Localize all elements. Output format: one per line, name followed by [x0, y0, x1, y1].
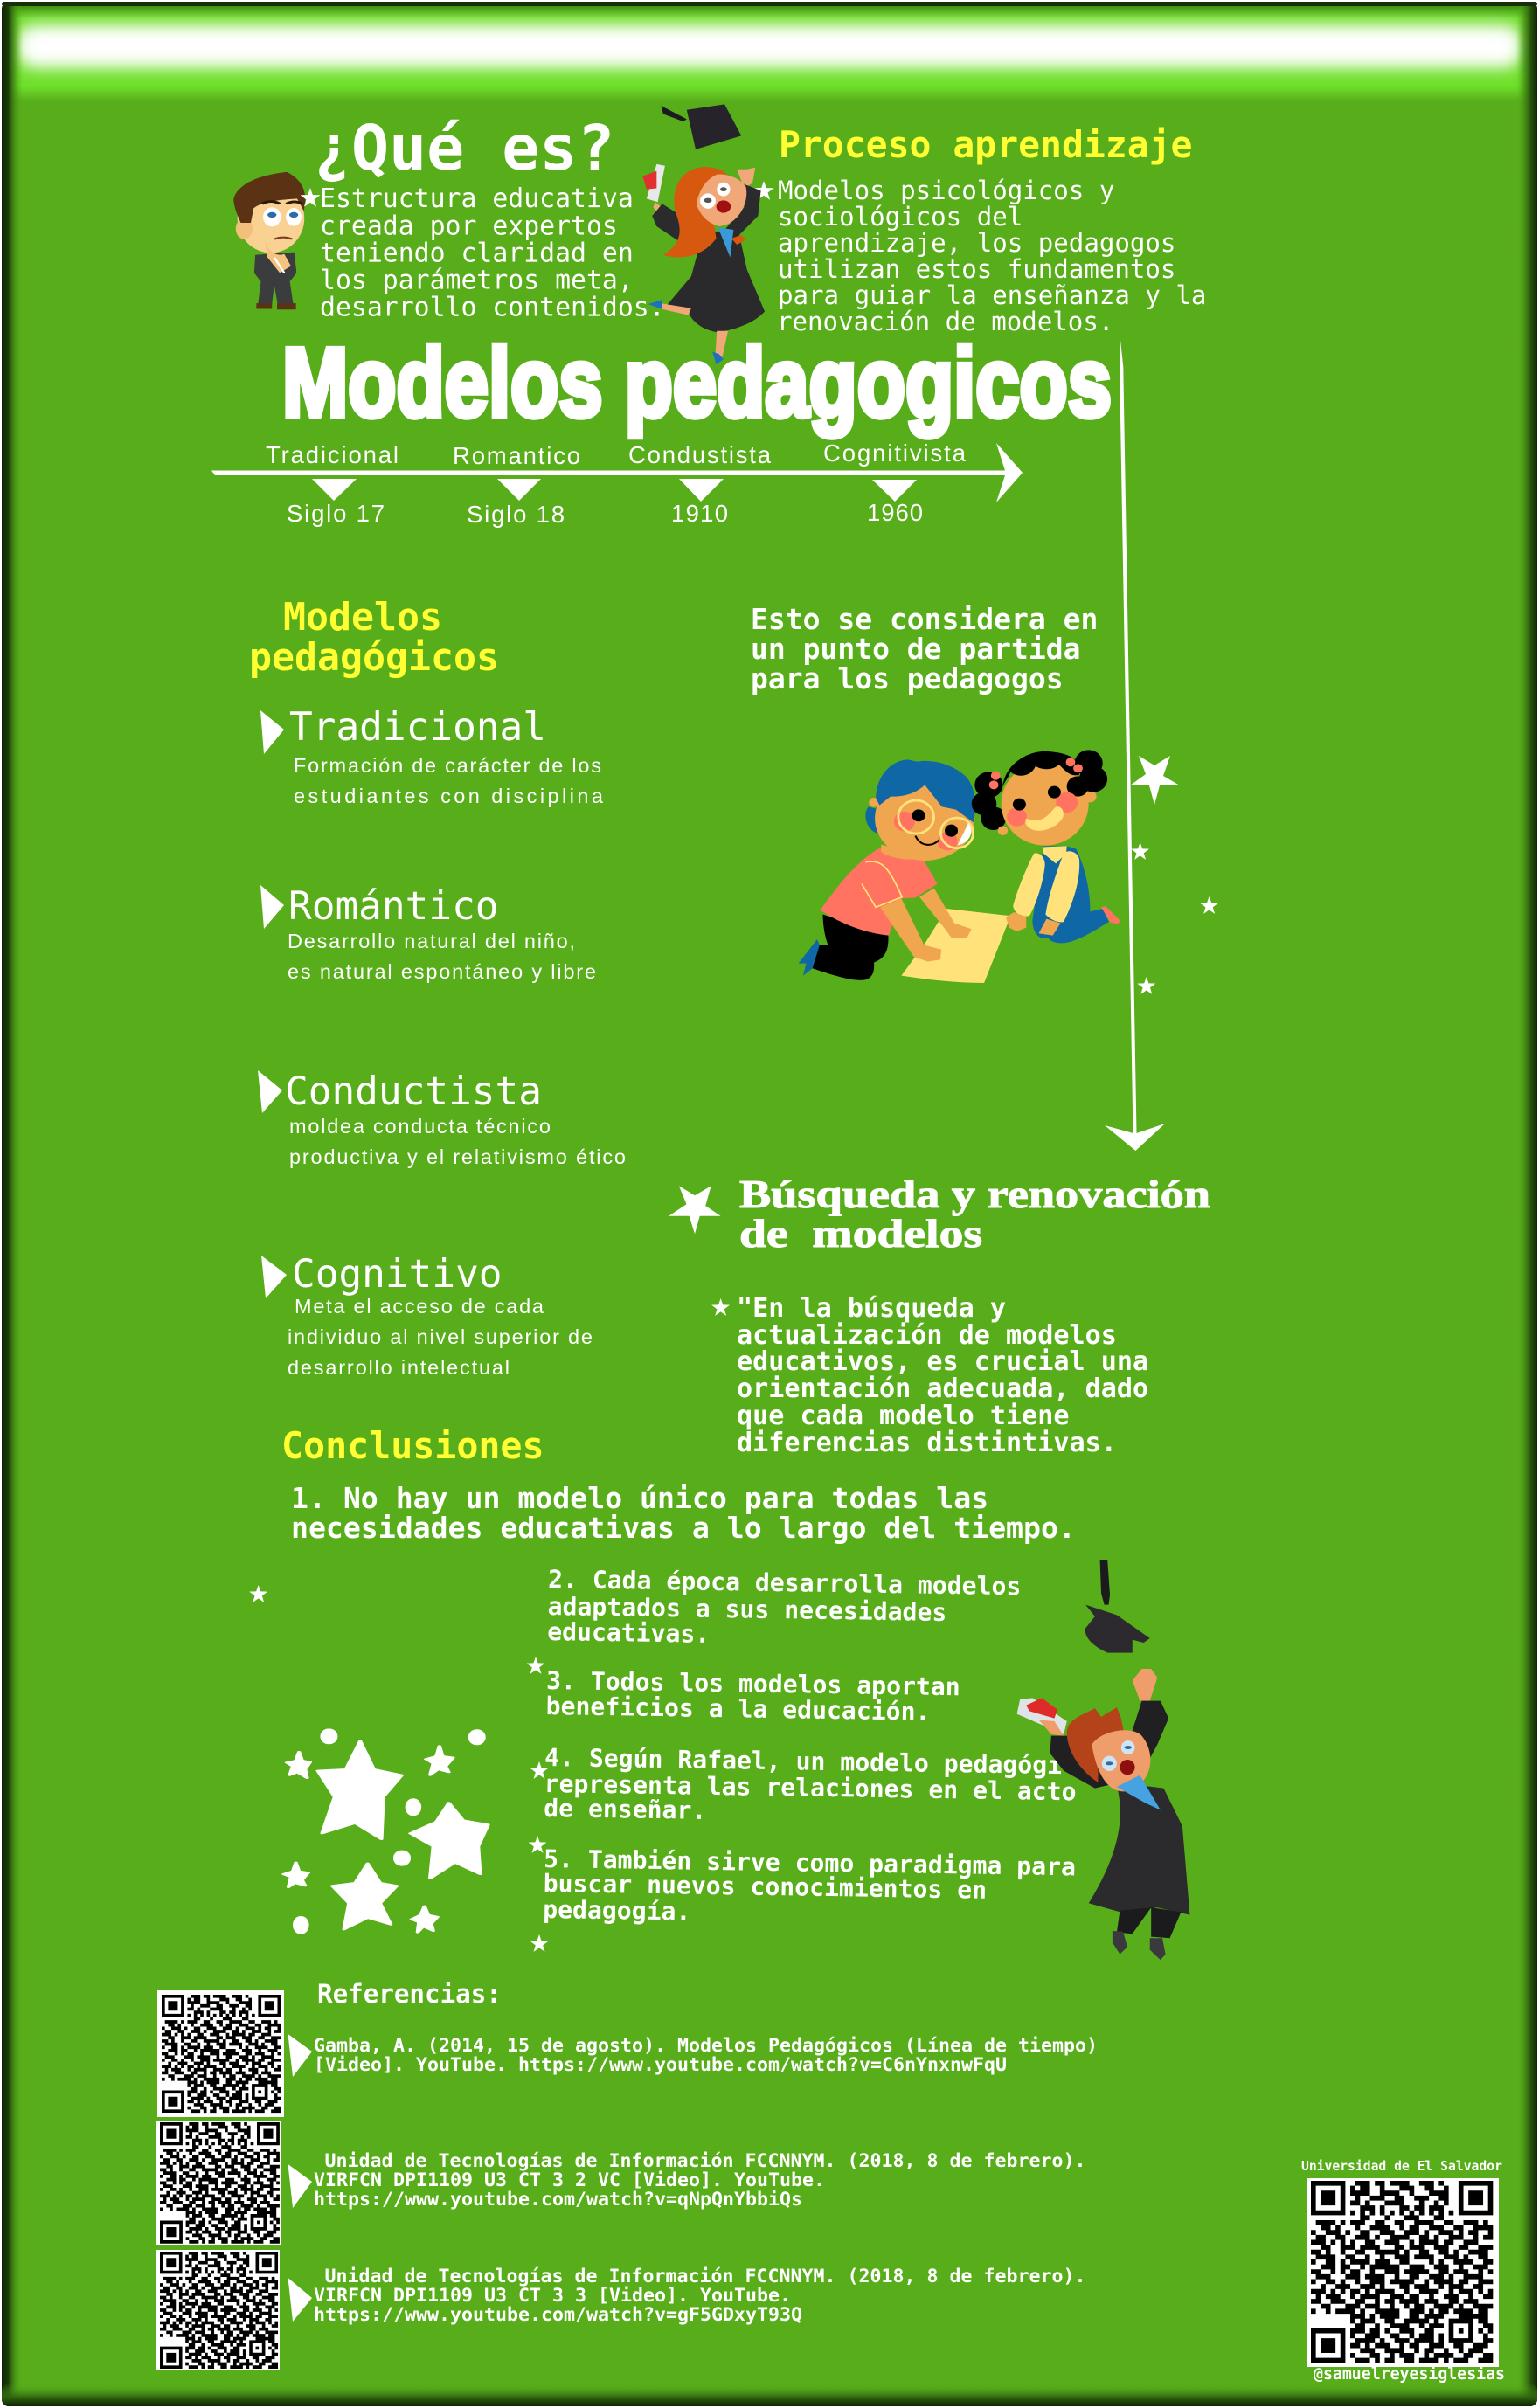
reference 2: VIRFCN DPI1109 U3 CT 3 2 VC [Video]. YouTube. — [314, 2169, 825, 2191]
heading: Búsqueda y renovación: Búsqueda y renovación — [739, 1173, 1210, 1216]
conclusion 3: 3. Todos los modelos aportan — [546, 1666, 960, 1701]
item: Tradicional: estudiantes con disciplina — [294, 785, 604, 807]
timeline: Romantico: Romantico — [453, 442, 580, 469]
icon: two children with paper — [799, 750, 1120, 983]
reference 1 — [288, 2034, 1098, 2077]
text: búsqueda y actualización: que cada modelo tiene — [737, 1401, 1069, 1431]
heading: Modelos pedagógicos: pedagógicos — [249, 636, 499, 680]
text: proceso aprendizaje: Modelos psicológicos y — [778, 176, 1114, 205]
text: proceso aprendizaje: utilizan estos fundamentos — [778, 254, 1175, 284]
text: búsqueda y actualización: "En la búsqueda y — [737, 1293, 1006, 1324]
item: Tradicional — [260, 705, 604, 807]
conclusion 5: buscar nuevos conocimientos en — [543, 1869, 987, 1905]
text: proceso aprendizaje: renovación de modelos. — [777, 307, 1113, 336]
conclusion 4: representa las relaciones en el acto — [544, 1769, 1077, 1806]
star bullet — [711, 1298, 730, 1316]
heading: Proceso aprendizaje: Proceso aprendizaje — [779, 124, 1192, 166]
star cluster — [283, 1729, 489, 1934]
decorative stars along arrow — [1130, 756, 1218, 994]
reference 3: VIRFCN DPI1109 U3 CT 3 3 [Video]. YouTube. — [314, 2285, 791, 2307]
conclusion 4 — [544, 1743, 1077, 1830]
reference 3: https://www.youtube.com/watch?v=gF5GDxyT93Q — [314, 2304, 802, 2326]
conclusion 2: educativas. — [547, 1617, 711, 1649]
text: que es: teniendo claridad en — [320, 238, 634, 269]
conclusion 1: necesidades educativas a lo largo del tiempo. — [291, 1511, 1076, 1545]
timeline: Cognitivista: Cognitivista — [823, 439, 967, 467]
reference 2: Unidad de Tecnologías de Información FCCNNYM. (2018, 8 de febrero). — [325, 2150, 1086, 2172]
icon: large star — [669, 1186, 721, 1234]
timeline: Cognitivista: 1960 — [867, 499, 923, 526]
conclusion 5: 5. También sirve como paradigma para — [544, 1844, 1076, 1881]
conclusion 4: de enseñar. — [544, 1794, 707, 1825]
conclusion 3: beneficios a la educación. — [545, 1692, 931, 1726]
timeline: Tradicional: Siglo 17 — [287, 500, 385, 527]
conclusion 3 — [545, 1666, 960, 1726]
heading: Referencias: Referencias: — [317, 1979, 502, 2009]
text: proceso aprendizaje: aprendizaje, los pedagogos — [778, 228, 1175, 258]
QR block: Universidad de El Salvador: Universidad de El Salvador — [1301, 2159, 1502, 2174]
item: Romántico: Desarrollo natural del niño, — [288, 930, 575, 952]
timeline: Romantico — [453, 442, 580, 528]
heading: Conclusiones: Conclusiones — [281, 1424, 544, 1467]
item: Cognitivo: individuo al nivel superior de — [288, 1325, 593, 1348]
timeline arrow — [211, 443, 1023, 502]
star bullet — [301, 188, 320, 207]
item: Tradicional: Tradicional — [289, 705, 546, 750]
small stars beside conclusions — [249, 1585, 548, 1952]
conclusion 2: 2. Cada época desarrolla modelos — [548, 1565, 1022, 1601]
heading: Búsqueda y renovación — [739, 1173, 1210, 1256]
timeline: Tradicional: Tradicional — [266, 441, 399, 468]
conclusion 1 — [291, 1481, 1076, 1545]
heading: Modelos pedagógicos: Modelos — [283, 596, 442, 640]
conclusion 2 — [547, 1565, 1022, 1653]
heading: Modelos pedagógicos — [249, 596, 499, 680]
reference 1: [Video]. YouTube. https://www.youtube.com/watch?v=C6nYnxnwFqU — [314, 2054, 1007, 2076]
text: búsqueda y actualización: actualización de modelos — [737, 1320, 1117, 1351]
reference 1: Gamba, A. (2014, 15 de agosto). Modelos Pedagógicos (Línea de tiempo) — [314, 2035, 1098, 2057]
heading: Qué es: ¿Qué es? — [314, 112, 614, 184]
timeline: Condustista: Condustista — [628, 441, 772, 468]
QR code 1 — [157, 1990, 284, 2117]
timeline: Cognitivista — [823, 439, 967, 526]
timeline: Romantico: Siglo 18 — [467, 501, 565, 528]
text: búsqueda y actualización: orientación adecuada, dado — [737, 1374, 1148, 1404]
text: que es: creada por expertos — [320, 211, 618, 241]
text: punto de partida — [751, 602, 1098, 695]
icon: girl graduate with cap — [642, 104, 765, 364]
reference 2 — [288, 2150, 1086, 2211]
item: Romántico — [260, 884, 596, 983]
text: que es: Estructura educativa — [320, 183, 634, 214]
text: que es: desarrollo contenidos. — [320, 292, 665, 323]
icon: boy graduate with cap — [1017, 1560, 1189, 1960]
item: Cognitivo: desarrollo intelectual — [288, 1356, 510, 1379]
text: proceso aprendizaje — [777, 176, 1206, 336]
timeline: Condustista: 1910 — [671, 500, 728, 527]
text: búsqueda y actualización: diferencias distintivas. — [737, 1428, 1117, 1458]
item: Conductista: Conductista — [285, 1069, 542, 1114]
text: proceso aprendizaje: para guiar la enseñanza y la — [778, 280, 1206, 310]
item: Cognitivo: Meta el acceso de cada — [295, 1295, 544, 1318]
text: que es — [320, 183, 665, 323]
conclusion 5 — [543, 1844, 1076, 1932]
star bullet — [754, 181, 773, 200]
reference 2: https://www.youtube.com/watch?v=qNpQnYbbiQs — [314, 2189, 802, 2211]
conclusion 2: adaptados a sus necesidades — [547, 1592, 947, 1627]
QR code 3 — [156, 2250, 280, 2370]
text: punto de partida: un punto de partida — [751, 632, 1080, 666]
item: Conductista: productiva y el relativismo ético — [289, 1145, 626, 1168]
timeline: Tradicional — [266, 441, 399, 527]
text: punto de partida: Esto se considera en — [751, 602, 1098, 636]
long vertical arrow — [1105, 340, 1165, 1151]
reference 3 — [288, 2266, 1086, 2326]
item: Conductista — [258, 1069, 626, 1168]
item: Tradicional: Formación de carácter de los — [294, 754, 601, 777]
text: búsqueda y actualización: educativos, es crucial una — [737, 1346, 1148, 1377]
QR code 2 — [156, 2121, 281, 2245]
icon: thinking man — [233, 172, 305, 309]
conclusion 5: pedagogía. — [543, 1895, 691, 1927]
heading: Búsqueda y renovación: de modelos — [739, 1212, 982, 1256]
reference 3: Unidad de Tecnologías de Información FCCNNYM. (2018, 8 de febrero). — [325, 2266, 1086, 2287]
text: que es: los parámetros meta, — [320, 266, 634, 295]
item: Romántico: Romántico — [288, 884, 499, 929]
item: Cognitivo: Cognitivo — [292, 1252, 503, 1297]
timeline: Condustista — [628, 441, 772, 527]
text: búsqueda y actualización — [737, 1293, 1148, 1458]
QR block: Universidad de El Salvador: @samuelreyesiglesias — [1314, 2365, 1505, 2384]
text: proceso aprendizaje: sociológicos del — [778, 202, 1023, 232]
item: Romántico: es natural espontáneo y libre — [288, 960, 596, 983]
conclusion 1: 1. No hay un modelo único para todas las — [291, 1481, 988, 1515]
text: punto de partida: para los pedagogos — [751, 661, 1064, 695]
main title: Modelos pedagogicos — [282, 329, 1112, 437]
item: Conductista: moldea conducta técnico — [289, 1115, 551, 1138]
item: Cognitivo — [261, 1252, 593, 1379]
QR block: Universidad de El Salvador — [1301, 2159, 1505, 2384]
conclusion 4: 4. Según Rafael, un modelo pedagógi — [544, 1743, 1062, 1780]
